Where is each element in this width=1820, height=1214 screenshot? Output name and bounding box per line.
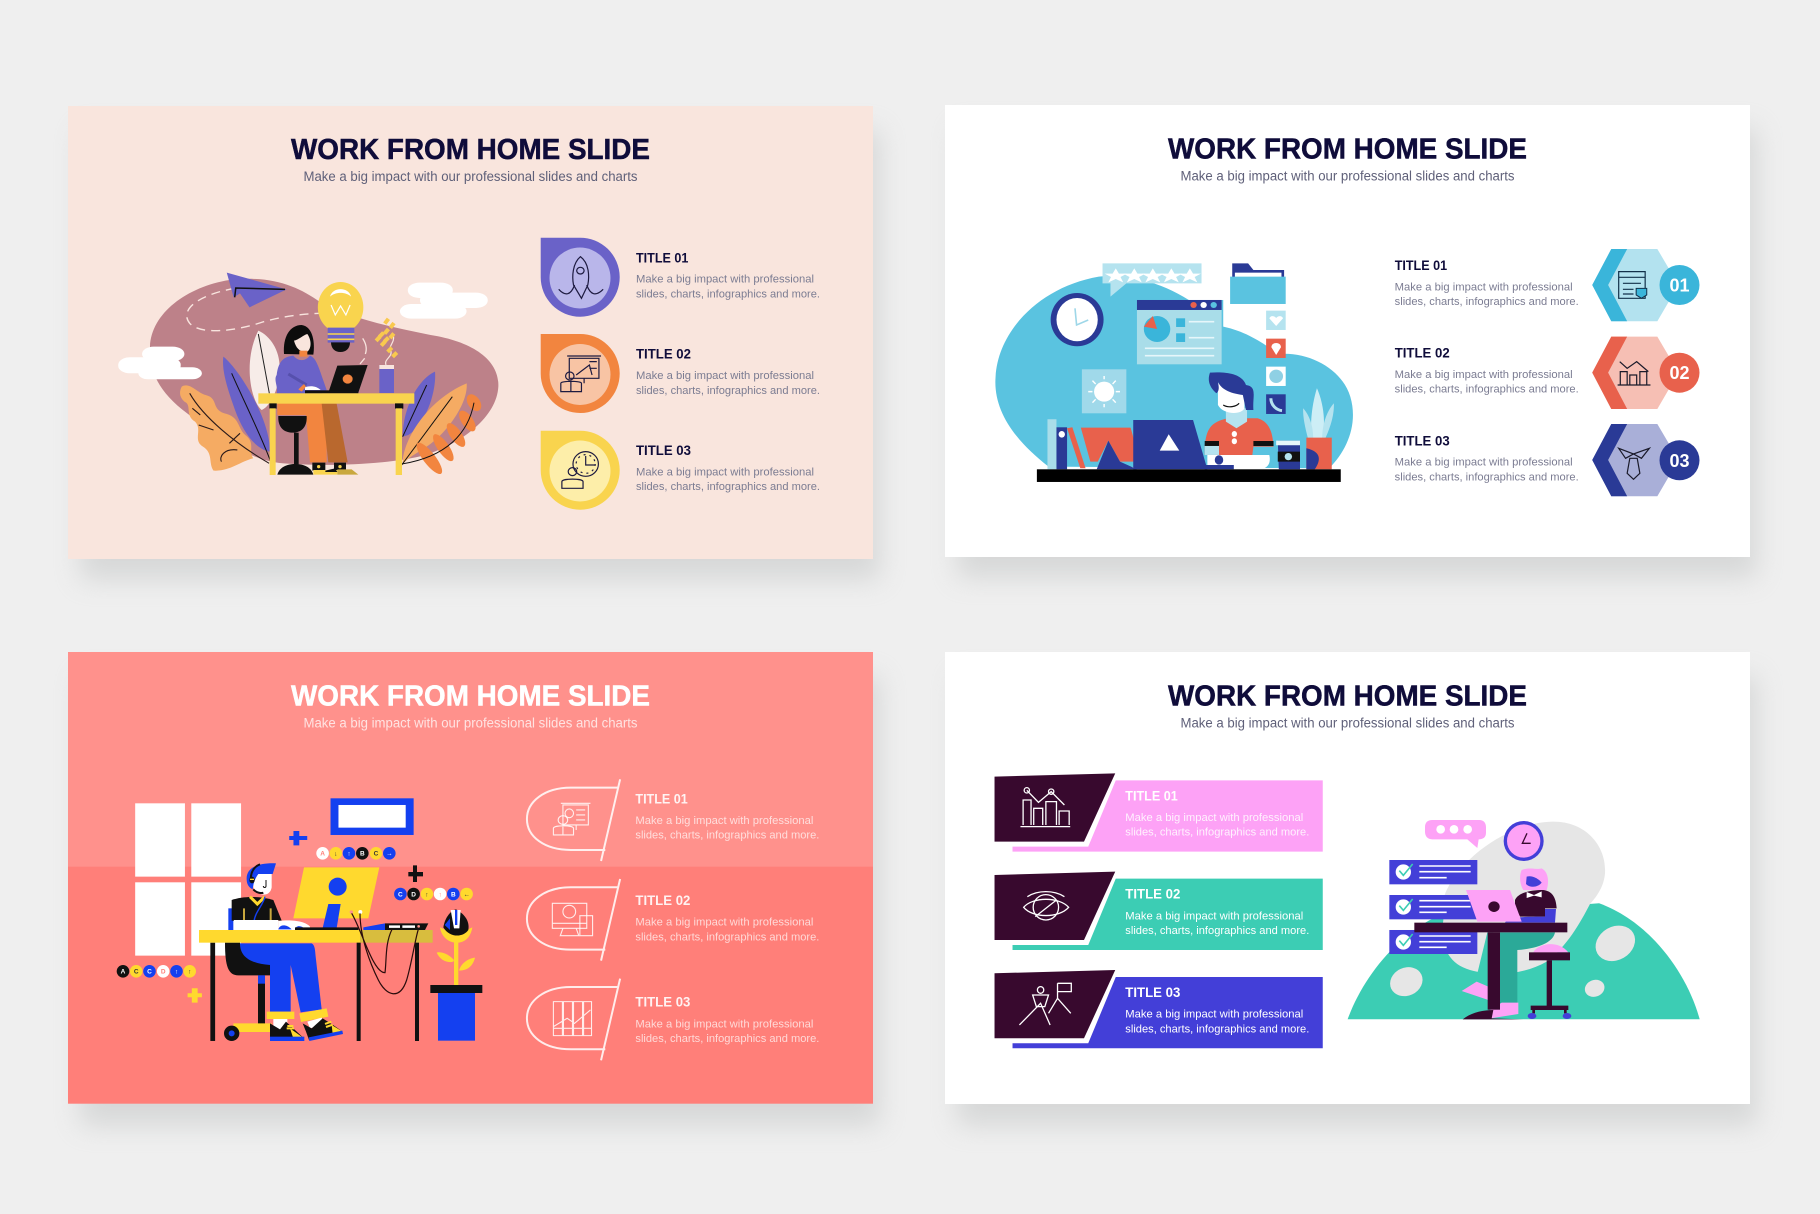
icons: key dots row one: → bbox=[386, 851, 393, 858]
item 2: devices outline badge bbox=[527, 879, 819, 961]
text: description 02: slides, charts, infographics and more. bbox=[636, 385, 820, 397]
icons: key dots row two: D bbox=[411, 891, 416, 898]
item 1: browser hexagon bbox=[1395, 249, 1700, 321]
text: description 01: Make a big impact with professional bbox=[1395, 281, 1573, 293]
item 3: necktie hexagon: 03 bbox=[1669, 451, 1690, 471]
item 3: clock badge bbox=[541, 431, 820, 510]
text: description 02: slides, charts, infographics and more. bbox=[1395, 384, 1579, 396]
icon: person and clock bbox=[562, 452, 598, 488]
icons: key dots row three: D bbox=[161, 969, 166, 976]
text: description 01: slides, charts, infographics and more. bbox=[1395, 296, 1579, 308]
icons: key dots row one: ↑ bbox=[347, 851, 351, 858]
text: description 02: Make a big impact with professional bbox=[1125, 910, 1303, 922]
text: description 03: slides, charts, infographics and more. bbox=[1125, 1023, 1309, 1035]
icons: key dots row one bbox=[316, 847, 396, 860]
icons: key dots row one: A bbox=[320, 851, 325, 858]
icons: key dots row two: ↑ bbox=[438, 891, 442, 898]
text: description 02: slides, charts, infographics and more. bbox=[1125, 925, 1309, 937]
text: title 03: TITLE 03 bbox=[1395, 432, 1450, 448]
text: title 03: TITLE 03 bbox=[1125, 984, 1180, 1000]
icons: key dots row three: C bbox=[134, 969, 139, 976]
item 1: browser hexagon: 01 bbox=[1669, 276, 1690, 296]
icons: key dots row three bbox=[117, 965, 196, 978]
subtitle: Make a big impact with our professional slides and charts bbox=[304, 716, 638, 730]
icons: key dots row three: ↑ bbox=[188, 969, 191, 976]
item 1: pink band bbox=[995, 773, 1323, 852]
illustration: man at yellow desk with monitor bbox=[135, 798, 482, 1041]
icons: key dots row three: A bbox=[121, 969, 126, 976]
number 02 bbox=[1660, 353, 1700, 393]
text: description 03: slides, charts, infographics and more. bbox=[1395, 471, 1579, 483]
item 2: chart hexagon bbox=[1395, 337, 1700, 409]
text: description 02: Make a big impact with professional bbox=[636, 370, 814, 382]
hexagon 02 bbox=[1592, 337, 1679, 409]
icons: key dots row three: ↑ bbox=[175, 969, 178, 976]
icons: key dots row three: C bbox=[147, 969, 152, 976]
text: description 01: Make a big impact with professional bbox=[636, 274, 814, 286]
item 2: teal band bbox=[995, 872, 1323, 950]
text: description 02: slides, charts, infographics and more. bbox=[635, 931, 819, 943]
text: description 03: slides, charts, infographics and more. bbox=[635, 1033, 819, 1045]
band and icon tile 01 bbox=[995, 773, 1323, 852]
text: title 02: TITLE 02 bbox=[1395, 345, 1450, 361]
text: description 03: Make a big impact with professional bbox=[636, 466, 814, 478]
item 2: presentation badge bbox=[541, 334, 820, 413]
text: description 02: Make a big impact with professional bbox=[635, 917, 813, 929]
text: description 03: Make a big impact with professional bbox=[1395, 457, 1573, 469]
item 3: blue band bbox=[995, 970, 1323, 1048]
illustration: woman at desk with light bulb bbox=[118, 273, 498, 477]
icons: key dots row one: C bbox=[374, 851, 379, 858]
item 1: rocket badge bbox=[541, 238, 820, 317]
title: WORK FROM HOME SLIDE bbox=[1168, 134, 1527, 166]
icons: key dots row two: ↑ bbox=[425, 891, 429, 898]
text: description 02: Make a big impact with professional bbox=[1395, 369, 1573, 381]
icons: key dots row one: B bbox=[360, 851, 365, 858]
text: title 03: TITLE 03 bbox=[636, 442, 691, 458]
item 3: necktie hexagon bbox=[1395, 424, 1700, 496]
number 01 bbox=[1660, 265, 1700, 305]
outline badge 01 bbox=[527, 779, 620, 861]
outline badge 03 bbox=[527, 979, 620, 1060]
hexagon 03 bbox=[1592, 424, 1679, 496]
subtitle: Make a big impact with our professional slides and charts bbox=[304, 169, 638, 184]
item 3: binders outline badge bbox=[527, 979, 819, 1060]
band and icon tile 02 bbox=[995, 872, 1323, 950]
text: title 02: TITLE 02 bbox=[1125, 886, 1180, 902]
illustration: man at laptop with apps bbox=[995, 263, 1353, 482]
number 03 bbox=[1660, 440, 1700, 480]
text: description 03: Make a big impact with professional bbox=[635, 1018, 813, 1030]
text: title 01: TITLE 01 bbox=[635, 790, 688, 806]
icons: key dots row two: C bbox=[398, 891, 403, 898]
subtitle: Make a big impact with our professional slides and charts bbox=[1180, 168, 1515, 184]
band and icon tile 03 bbox=[995, 970, 1323, 1048]
text: title 02: TITLE 02 bbox=[636, 346, 691, 362]
text: description 01: slides, charts, infographics and more. bbox=[1125, 827, 1309, 839]
panel: slide 3 coral bbox=[68, 652, 873, 1104]
icons: key dots row two bbox=[394, 888, 473, 900]
title: WORK FROM HOME SLIDE bbox=[1168, 680, 1527, 712]
illustration: person at standing desk on teal hill bbox=[1348, 820, 1700, 1019]
hexagon 01 bbox=[1592, 249, 1679, 321]
text: description 01: Make a big impact with professional bbox=[1125, 812, 1303, 824]
text: title 03: TITLE 03 bbox=[635, 994, 691, 1010]
text: title 01: TITLE 01 bbox=[1395, 257, 1447, 273]
text: description 03: slides, charts, infographics and more. bbox=[636, 481, 820, 493]
text: description 01: slides, charts, infographics and more. bbox=[635, 830, 819, 842]
panel: slide 2 white blue bbox=[945, 105, 1750, 557]
panel: slide 4 white violet bbox=[945, 652, 1750, 1104]
title: WORK FROM HOME SLIDE bbox=[291, 134, 650, 166]
panel: slide 1 peach bbox=[68, 106, 873, 559]
text: description 01: Make a big impact with professional bbox=[635, 815, 813, 827]
text: title 02: TITLE 02 bbox=[635, 892, 691, 908]
icons: key dots row one: ↓ bbox=[334, 851, 337, 858]
item 1: presenter outline badge bbox=[527, 779, 819, 861]
subtitle: Make a big impact with our professional slides and charts bbox=[1180, 716, 1515, 730]
icon: rocket bbox=[559, 257, 603, 298]
text: title 01: TITLE 01 bbox=[636, 249, 689, 265]
text: description 01: slides, charts, infographics and more. bbox=[636, 288, 820, 300]
item 2: chart hexagon: 02 bbox=[1669, 363, 1690, 383]
icon: presenter bbox=[561, 356, 601, 392]
icons: key dots row two: ← bbox=[463, 891, 470, 898]
outline badge 02 bbox=[527, 879, 620, 961]
icons: key dots row two: B bbox=[451, 891, 456, 898]
text: description 03: Make a big impact with professional bbox=[1125, 1009, 1303, 1021]
title: WORK FROM HOME SLIDE bbox=[291, 680, 650, 712]
text: title 01: TITLE 01 bbox=[1125, 787, 1178, 803]
